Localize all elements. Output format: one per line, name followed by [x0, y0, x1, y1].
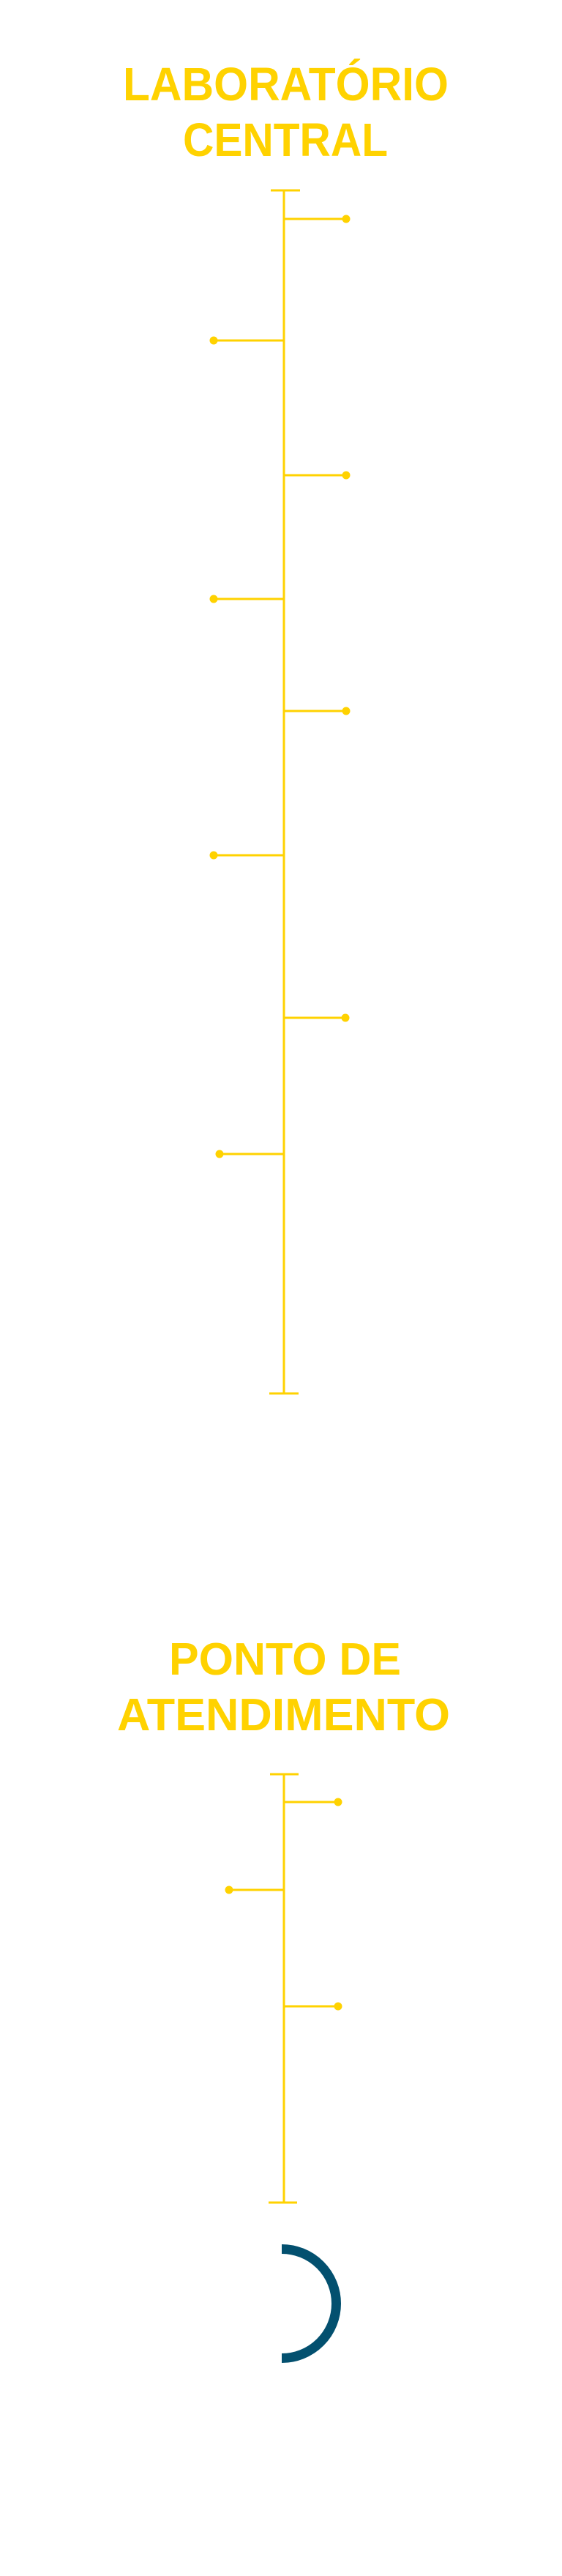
branch 4 — [209, 595, 284, 603]
branch 2 — [225, 1886, 284, 1894]
branch 3 — [284, 2002, 342, 2011]
timeline: laboratório central — [209, 190, 350, 1393]
branch 5 — [284, 707, 350, 715]
title: ponto de atendimento: ATENDIMENTO — [117, 1690, 450, 1741]
timeline: ponto de atendimento — [225, 1774, 342, 2203]
branch 8 — [215, 1150, 284, 1158]
arc: half circle — [282, 2249, 337, 2358]
branch 3 — [284, 472, 350, 479]
title: laboratório central — [123, 58, 449, 166]
branch 6 — [209, 851, 284, 860]
branch 2 — [209, 337, 284, 344]
branch 1 — [284, 215, 350, 223]
branch 7 — [284, 1013, 350, 1022]
title: laboratório central: CENTRAL — [183, 113, 388, 166]
title: ponto de atendimento — [117, 1634, 450, 1741]
title: ponto de atendimento: PONTO DE — [169, 1634, 401, 1685]
title: laboratório central: LABORATÓRIO — [123, 58, 449, 111]
branch 1 — [284, 1798, 342, 1806]
